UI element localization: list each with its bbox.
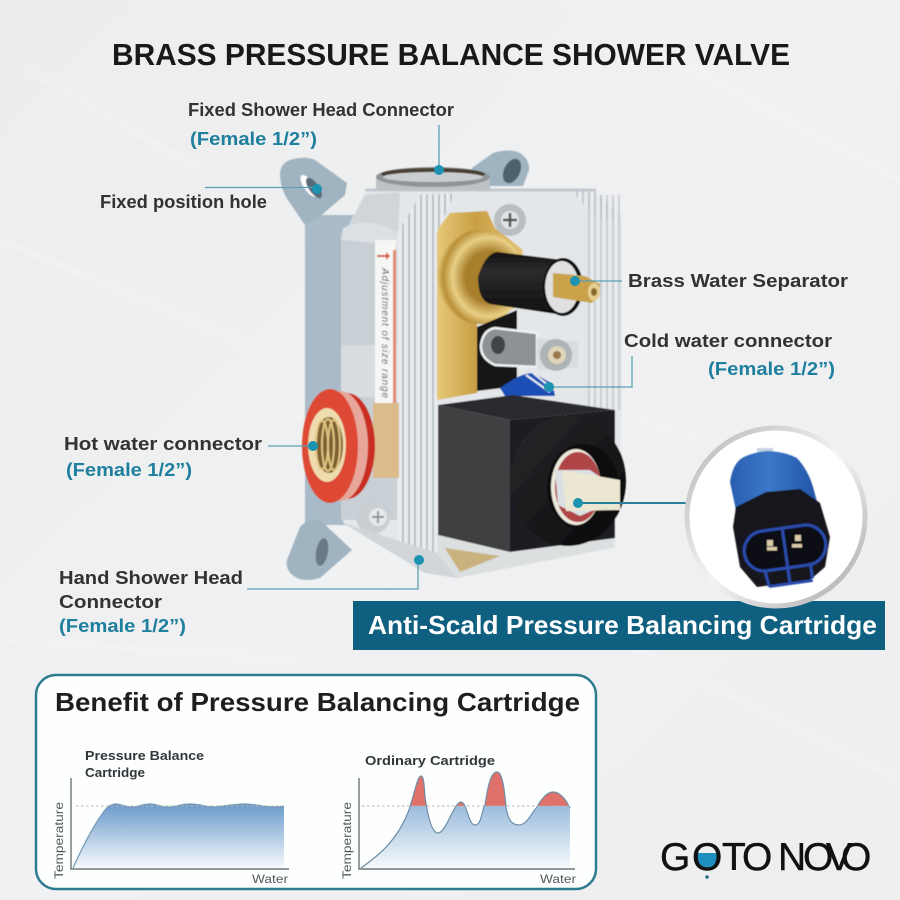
chart: pressure balance cartridge: Water [252, 872, 288, 886]
chart: ordinary cartridge [340, 753, 576, 886]
label: hot water connector: (Female 1/2”) [66, 460, 192, 480]
valve illustration [280, 150, 626, 580]
panel: benefit of pressure balancing cartridge [36, 675, 596, 889]
label: hand shower head connector [59, 568, 243, 636]
chart: pressure balance cartridge [52, 748, 289, 886]
lower screw [356, 500, 390, 534]
chart: pressure balance cartridge: Pressure Balance [85, 748, 204, 763]
collar at top outlet [376, 167, 490, 190]
bottom clear chamfer [343, 523, 615, 578]
banner: anti-scald cartridge [353, 601, 885, 650]
label: brass water separator: Brass Water Separator [628, 271, 848, 291]
label: fixed shower head connector: (Female 1/2”) [190, 129, 317, 149]
black separator sleeve [478, 252, 600, 316]
label: fixed shower head connector [188, 100, 454, 149]
icon: cartridge [730, 448, 831, 589]
brass body [437, 211, 523, 400]
label: fixed shower head connector: Fixed Shower Head Connector [188, 100, 454, 120]
label: hand shower head connector: Hand Shower Head [59, 568, 243, 588]
leader lines [205, 125, 686, 589]
mounting screw [494, 204, 526, 236]
chart: ordinary cartridge: Ordinary Cartridge [365, 753, 495, 768]
hot water connector port [302, 389, 399, 503]
size range label: Adjustment of size range [379, 267, 390, 398]
leader dots [308, 165, 583, 565]
label: hot water connector: Hot water connector [64, 434, 262, 454]
label: cold water connector: (Female 1/2”) [708, 359, 835, 379]
mounting plate [280, 150, 529, 580]
label: cold water connector: Cold water connector [624, 331, 832, 351]
label: hot water connector [64, 434, 262, 480]
title: BRASS PRESSURE BALANCE SHOWER VALVE [112, 37, 790, 72]
label: cold water connector [624, 331, 835, 379]
label: hand shower head connector: Connector [59, 592, 162, 612]
blue cold water seal [500, 373, 555, 396]
chart: pressure balance cartridge: Cartridge [85, 765, 145, 780]
logo: gotonovo: GOTONOVO [660, 836, 871, 879]
clear bracket and nut [481, 328, 578, 371]
chart: ordinary cartridge: Temperature [340, 802, 354, 879]
black control housing [438, 395, 626, 552]
clear housing [341, 190, 622, 578]
size range label [375, 240, 396, 417]
panel heading: Benefit of Pressure Balancing Cartridge [55, 687, 580, 717]
callout: cartridge close-up [687, 428, 865, 606]
front pillar [398, 193, 455, 552]
chart: pressure balance cartridge: Temperature [52, 802, 66, 879]
label: fixed position hole: Fixed position hole [100, 192, 267, 212]
label: hand shower head connector: (Female 1/2”) [59, 616, 186, 636]
chart: ordinary cartridge: Water [540, 872, 576, 886]
cartridge stem in dome [547, 444, 620, 530]
banner: anti-scald cartridge: Anti-Scald Pressure Balancing Cartridge [368, 610, 877, 640]
